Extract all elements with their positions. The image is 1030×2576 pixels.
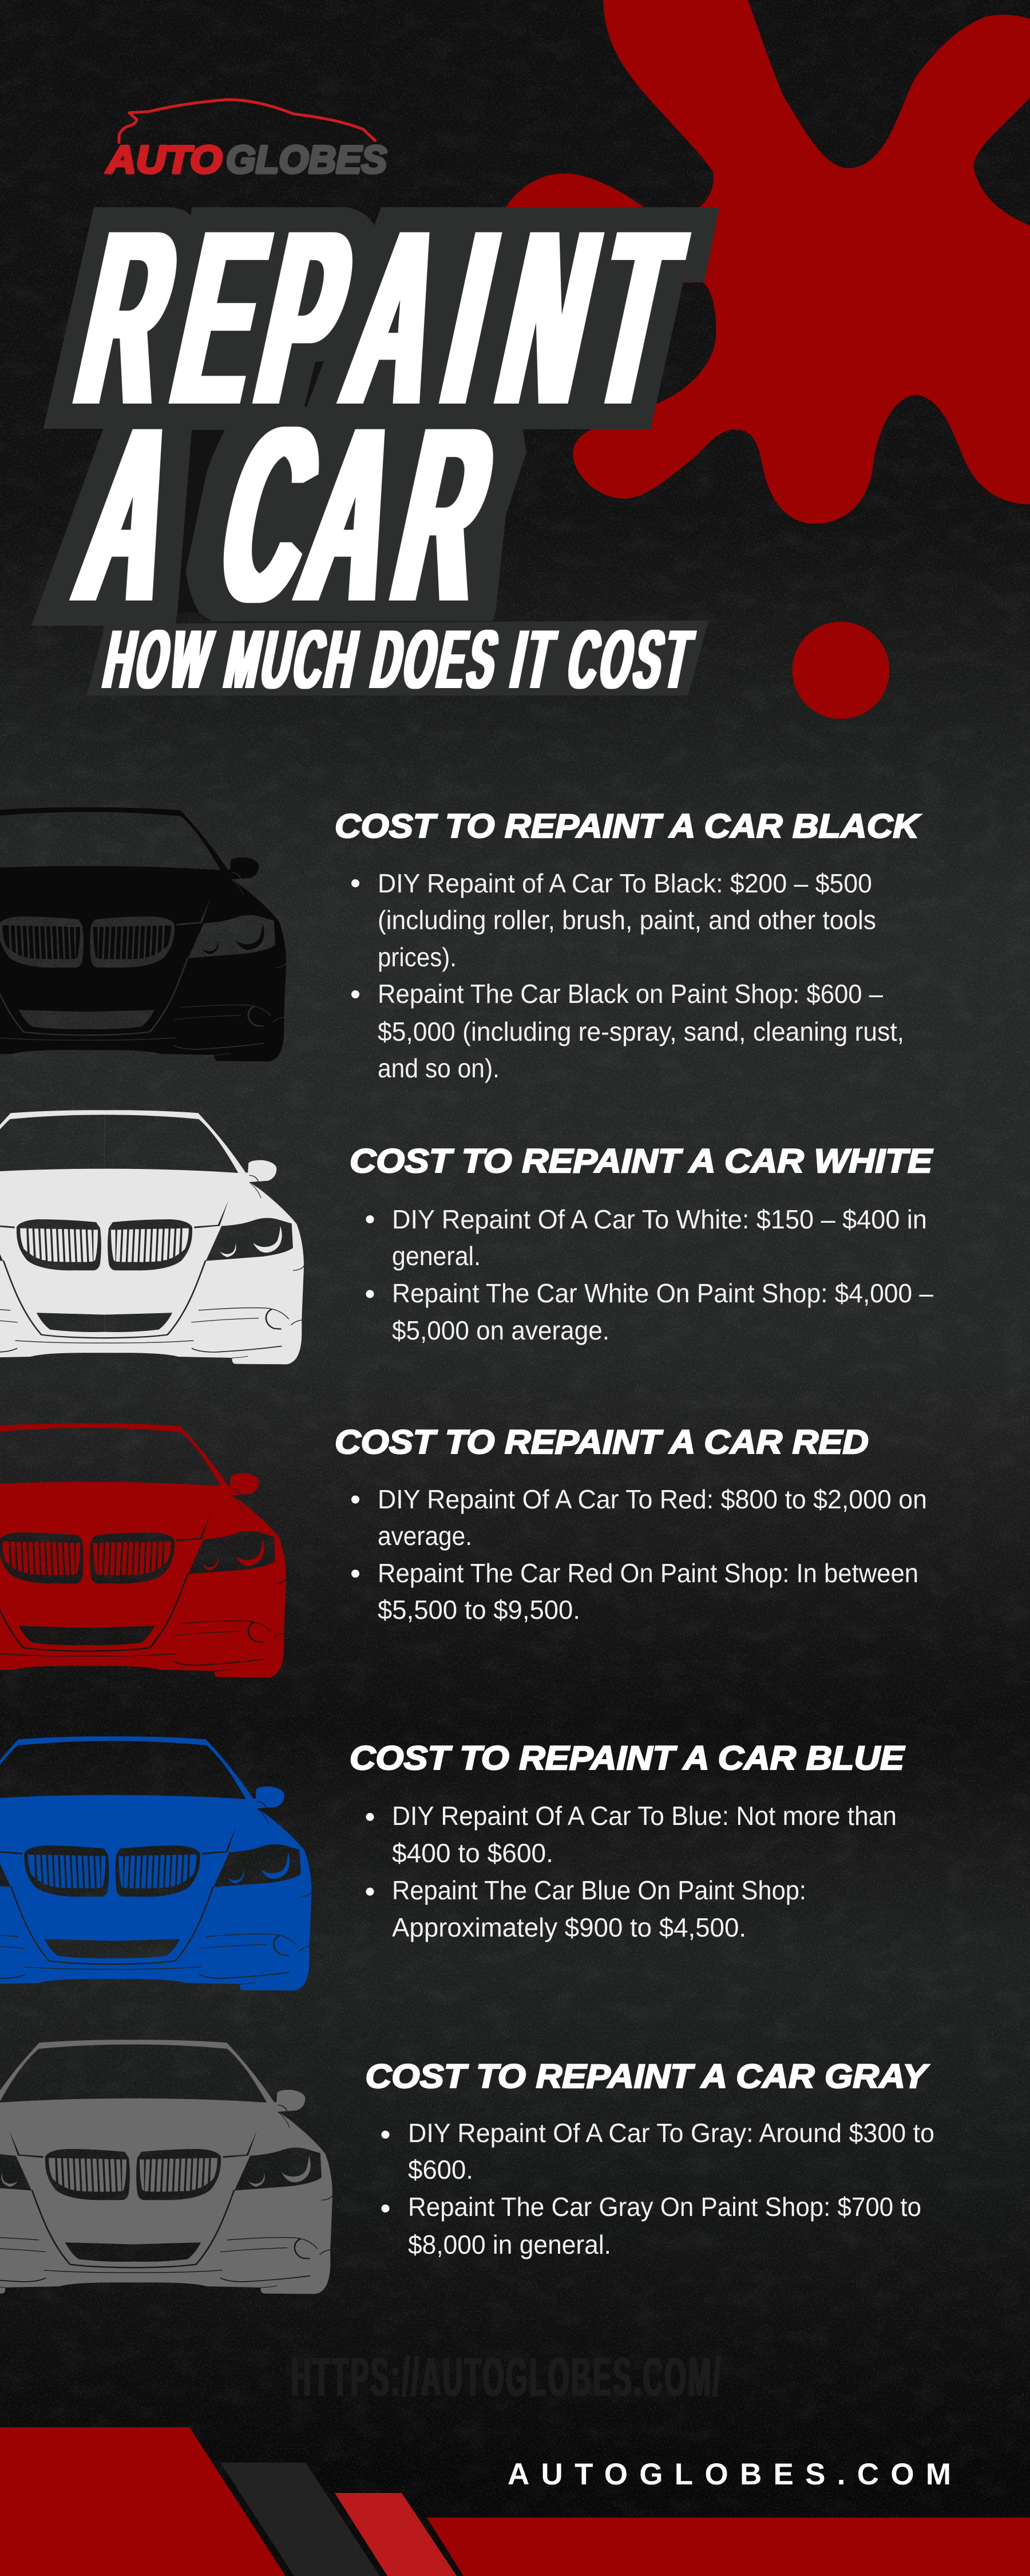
car: gray — [0, 2017, 429, 2361]
paint drop — [792, 622, 889, 719]
footer red block left — [0, 2427, 286, 2576]
bullet list: blue: DIY Repaint Of A Car To Blue: Not more than — [392, 1801, 897, 1831]
bullet list: red: $5,500 to $9,500. — [378, 1595, 580, 1625]
panel: black cost — [335, 808, 921, 1083]
bullet list: white: general. — [392, 1241, 481, 1271]
footer dark stripe — [220, 2463, 380, 2576]
paint splat — [506, 0, 1030, 719]
bullet list: white — [366, 1204, 933, 1345]
car: blue — [0, 1714, 409, 2057]
heading: black: COST TO REPAINT A CAR BLACK — [335, 808, 921, 845]
heading: red: COST TO REPAINT A CAR RED — [335, 1424, 869, 1461]
bullet list: blue: Approximately $900 to $4,500. — [392, 1913, 746, 1942]
backing gaps — [177, 361, 324, 613]
car: black — [0, 785, 383, 1128]
heading: gray: COST TO REPAINT A CAR GRAY — [365, 2058, 930, 2095]
title backing — [31, 207, 719, 696]
panel: gray cost — [365, 2058, 934, 2259]
bullet list: red — [351, 1484, 927, 1625]
bullet list: gray: $600. — [408, 2155, 473, 2184]
heading: blue: COST TO REPAINT A CAR BLUE — [350, 1740, 906, 1777]
title line A CAR: A CAR — [61, 376, 513, 654]
bullet list: white: Repaint The Car White On Paint Shop: $4,000 – — [392, 1278, 933, 1308]
panel: red cost — [335, 1424, 927, 1625]
footer bright stripe — [335, 2493, 457, 2576]
bullet list: black: Repaint The Car Black on Paint Shop: $600 – — [378, 979, 883, 1009]
logo word AUTO: AUTO — [105, 138, 222, 181]
bullet list: black — [351, 868, 904, 1083]
bullet list: gray: DIY Repaint Of A Car To Gray: Around $300 to — [408, 2118, 934, 2148]
bullet list: gray — [381, 2118, 934, 2259]
bullet list: red: Repaint The Car Red On Paint Shop: In between — [378, 1558, 918, 1588]
watermark url: HTTPS://AUTOGLOBES.COM/ — [291, 2346, 720, 2408]
bullet list: white: $5,000 on average. — [392, 1315, 609, 1345]
panel: white cost — [350, 1143, 934, 1345]
bullet list: black: (including roller, brush, paint, and other tools — [378, 905, 876, 935]
footer shapes — [0, 2427, 1030, 2576]
bullet list: white: DIY Repaint Of A Car To White: $150 – $400 in — [392, 1204, 927, 1234]
footer website: AUTOGLOBES.COM — [508, 2458, 951, 2491]
bullet list: black: $5,000 (including re-spray, sand, cleaning rust, — [378, 1017, 904, 1046]
footer red block right — [427, 2518, 1030, 2576]
logo car outline — [119, 100, 376, 144]
bullet list: blue — [366, 1801, 897, 1942]
car: white — [0, 1088, 401, 1431]
bullet list: blue: $400 to $600. — [392, 1838, 553, 1868]
panel: blue cost — [350, 1740, 906, 1942]
bullet list: blue: Repaint The Car Blue On Paint Shop: — [392, 1875, 806, 1905]
bullet list: black: prices). — [378, 942, 457, 972]
car: red — [0, 1401, 383, 1744]
heading: white: COST TO REPAINT A CAR WHITE — [350, 1143, 934, 1180]
logo — [105, 100, 387, 181]
bullet list: gray: Repaint The Car Gray On Paint Shop: $700 to — [408, 2192, 921, 2222]
title line REPAINT: REPAINT — [60, 179, 699, 457]
bullet list: gray: $8,000 in general. — [408, 2230, 611, 2259]
bullet list: red: DIY Repaint Of A Car To Red: $800 to $2,000 on — [378, 1484, 927, 1514]
subtitle: HOW MUCH DOES IT COST — [97, 613, 699, 706]
bullet list: red: average. — [378, 1521, 472, 1551]
bullet list: black: and so on). — [378, 1053, 500, 1083]
bullet list: black: DIY Repaint of A Car To Black: $200 – $500 — [378, 868, 872, 898]
logo word GLOBES: GLOBES — [226, 138, 387, 181]
